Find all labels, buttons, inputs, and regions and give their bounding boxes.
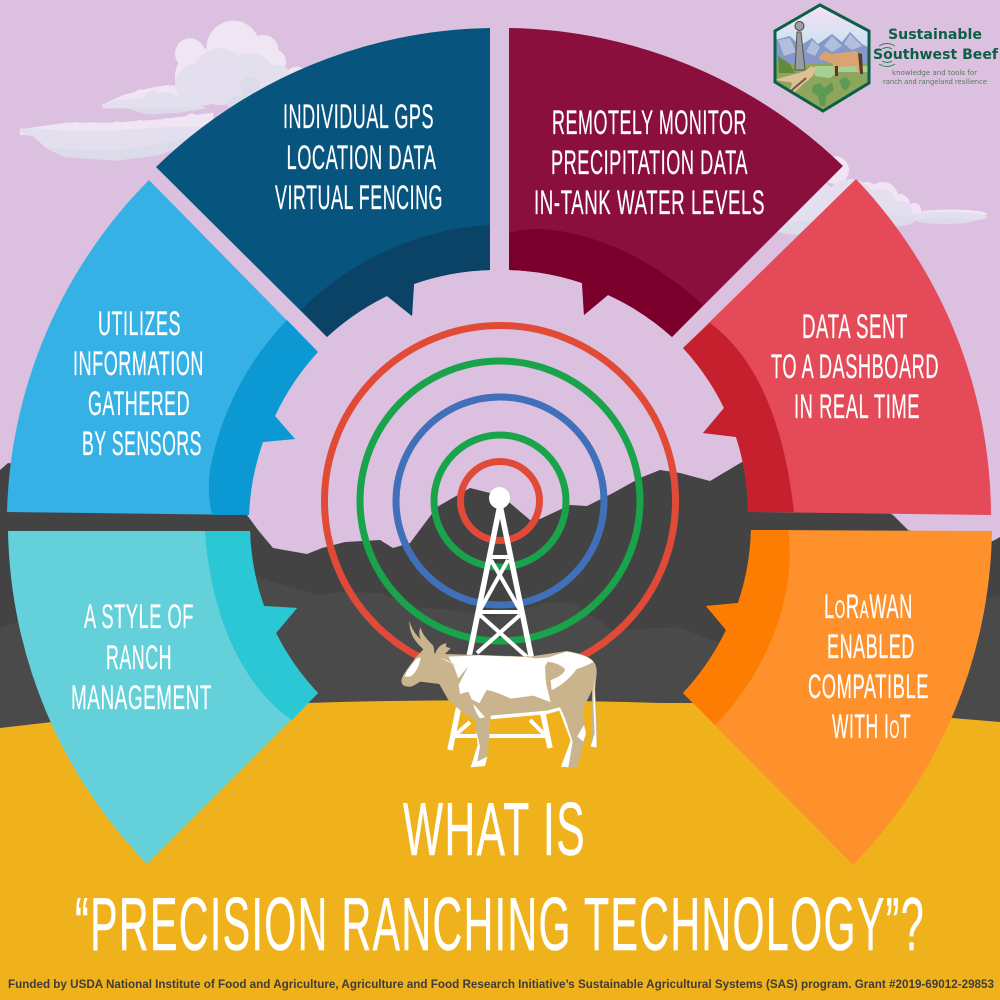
logo road [776,66,816,92]
cow silhouette [401,621,597,768]
panel text: INFORMATION [73,345,204,383]
panel text: WITH IOT [832,708,911,746]
panel text [71,598,212,717]
panel base red [683,179,991,515]
icon: cow [401,621,597,768]
panel text: IN-TANK WATER LEVELS [534,184,765,222]
panel text: RANCH [106,639,172,677]
icon: radio tower [450,487,550,750]
mountains lighter ridge [0,577,1000,740]
panel text [73,305,204,463]
panel text: MANAGEMENT [71,679,212,717]
logo tagline: ranch and rangeland resilience [883,78,987,86]
panel base navy [156,28,490,337]
logo wordmark: Southwest Beef [873,47,999,63]
signal rings [324,326,676,676]
panel text [808,588,929,746]
inner band [301,225,490,337]
logo cow [819,51,862,76]
panel text: VIRTUAL FENCING [275,179,443,217]
logo pasture [775,64,870,112]
panel base aqua [8,531,318,864]
inner band [509,229,703,337]
panel: utilizes information [7,180,318,515]
panel text: UTILIZES [98,305,181,343]
panel base maroon [509,28,843,337]
panel text: BY SENSORS [82,425,202,463]
inner band [205,531,318,720]
inner band [683,530,790,725]
panel base orange [683,530,992,865]
logo tagline: knowledge and tools for [892,69,977,77]
panel: LoRaWAN [683,530,992,865]
panel text [771,308,939,426]
logo cactus [812,82,834,106]
panel text: A STYLE OF [84,598,194,636]
logo mountains [775,32,870,66]
panel text: REMOTELY MONITOR [552,104,747,142]
panel text: PRECIPITATION DATA [551,144,748,182]
logo: Sustainable Southwest Beef [775,5,999,112]
title line one: WHAT IS [403,787,586,871]
panel text: LORAWAN [824,588,913,626]
panel: GPS and virtual fencing [156,28,490,337]
logo bush [778,56,795,73]
title [75,787,925,966]
footer funding note: Funded by USDA National Institute of Food and Agriculture, Agriculture and Food Research Initiative’s Sustainable Agricultural Systems (SAS) program. Grant #2019-69012-29853 [8,979,994,991]
mountains dark range [0,462,1000,740]
panel text: ENABLED [827,628,915,666]
panel: dashboard data [683,179,991,515]
panel base light blue [7,180,318,515]
panel text [534,104,765,222]
cow white markings [405,652,597,767]
panel: remote monitoring [509,28,843,337]
panel text [275,98,443,217]
logo wordmark [873,27,999,63]
logo hexagon badge [775,5,870,112]
logo signal arcs [879,44,895,66]
logo windmill [795,32,805,70]
cloud right [773,156,987,236]
logo wordmark: Sustainable [888,27,982,43]
panel text: LOCATION DATA [286,139,436,177]
panel text: DATA SENT [802,308,908,346]
panel: ranch management style [8,531,318,864]
inner band [683,323,794,512]
panel text: GATHERED [88,385,190,423]
inner band [209,320,318,515]
panel text: INDIVIDUAL GPS [283,98,434,136]
ground hill [0,700,1000,1000]
logo tagline [883,69,987,86]
clouds upper left [19,21,308,161]
